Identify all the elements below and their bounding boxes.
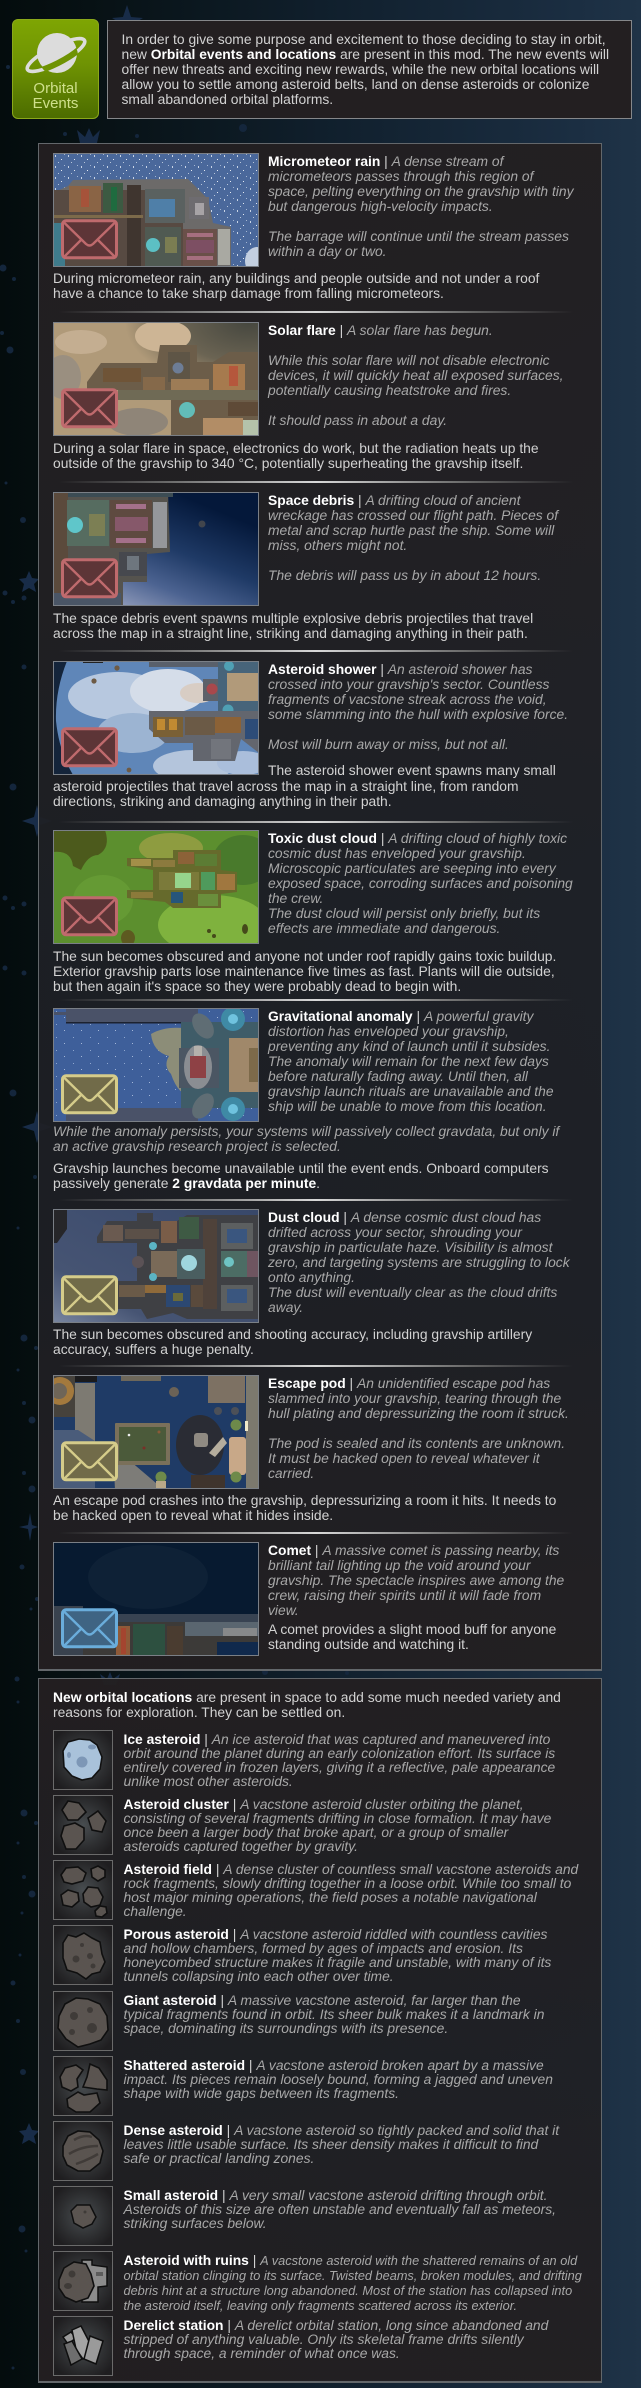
effect text: The space debris event spawns multiple explosive debris projectiles that travel — [53, 610, 533, 626]
description — [268, 153, 574, 259]
description: The dust cloud will persist only briefly, but its — [268, 905, 540, 921]
icon: envelope — [62, 898, 116, 935]
description: gravship. The spectacle inspires awe among the — [268, 1572, 564, 1588]
description: tunnels collapsing into each other over time. — [124, 1968, 394, 1984]
description: impact. Its pieces remain loosely bound, forming a jagged and uneven — [124, 2071, 553, 2087]
description — [268, 1008, 554, 1114]
description: some slamming into the hull with explosive force. — [268, 706, 568, 722]
icon: asteroid with ruins — [53, 2251, 113, 2311]
description: entirely covered in frozen layers, giving it a reflective, pale appearance — [124, 1759, 555, 1775]
image: comet scene with envelope — [53, 1542, 259, 1656]
description: Toxic dust cloud | A drifting cloud of highly toxic — [268, 830, 567, 846]
effect text — [53, 440, 539, 471]
description — [268, 1209, 570, 1315]
description: striking surfaces below. — [124, 2215, 267, 2231]
event: Asteroid shower: directions, striking and damaging anything in their path. — [53, 792, 392, 808]
description: Shattered asteroid | A vacstone asteroid broken apart by a massive — [124, 2057, 544, 2073]
description: crossed into your gravship's sector. Countless — [268, 676, 549, 692]
description: Asteroids of this size are often unstable and eventually fall as meteors, — [124, 2201, 556, 2217]
description: debris hint at a structure long abandoned. Most of the station has collapsed into — [124, 2283, 572, 2298]
description: It should pass in about a day. — [268, 412, 447, 428]
logo: Orbital Events — [12, 19, 99, 119]
description: the asteroid itself, leaving only fragments scattered across its exterior. — [124, 2298, 517, 2313]
effect text — [53, 1492, 556, 1523]
icon: small asteroid — [53, 2186, 113, 2246]
description: through space, a reminder of what once was. — [124, 2345, 400, 2361]
effect text: During micrometeor rain, any buildings and people outside and not under a roof — [53, 270, 539, 286]
effect text: The sun becomes obscured and anyone not under roof rapidly gains toxic buildup. — [53, 948, 556, 964]
description: unlike most other asteroids. — [124, 1773, 293, 1789]
description: asteroids captured together by gravity. — [124, 1838, 358, 1854]
description — [124, 2253, 582, 2313]
location: Ice asteroid — [53, 1730, 555, 1790]
image: dust cloud scene with envelope — [53, 1209, 259, 1323]
effect text: While the anomaly persists, your systems will passively collect gravdata, but only if — [53, 1122, 559, 1138]
location: Derelict station — [53, 2316, 588, 2376]
logo label — [33, 80, 78, 112]
description — [268, 492, 560, 583]
image: toxic dust cloud scene with envelope — [53, 830, 259, 944]
description: micrometeors passes through this region of — [268, 168, 533, 184]
location: Porous asteroid — [53, 1925, 588, 1985]
description: devices, it will quickly heat all exposed surfaces, — [268, 367, 563, 383]
description: Derelict station | A derelict orbital station, long since abandoned and — [124, 2317, 548, 2333]
description: typical fragments found in orbit. Its sheer bulk makes it a landmark in — [124, 2006, 544, 2022]
intro text box: small abandoned orbital platforms. — [122, 90, 333, 106]
description: Space debris | A drifting cloud of ancient — [268, 492, 520, 508]
description: view. — [268, 1602, 299, 1618]
icon: porous asteroid — [53, 1925, 113, 1985]
description: slammed into your gravship, tearing through the — [268, 1390, 561, 1406]
icon: envelope — [62, 1610, 116, 1647]
description: Escape pod | An unidentified escape pod has — [268, 1375, 550, 1391]
description: While this solar flare will not disable electronic — [268, 352, 550, 368]
effect text: across the map in a straight line, striking and damaging anything in their path. — [53, 625, 528, 641]
image: escape pod scene with envelope — [53, 1375, 259, 1489]
description: potentially causing heatstroke and fires. — [268, 382, 511, 398]
icon: envelope — [62, 390, 116, 427]
effect text — [53, 948, 556, 994]
description: Microscopic particulates are seeping into every — [268, 860, 556, 876]
description: shape with wide gaps between its fragments. — [124, 2085, 399, 2101]
description: orbit around the planet during an early colonization effort. Its surface is — [124, 1745, 555, 1761]
effect text: outside of the gravship to 340 °C, potentially superheating the gravship itself. — [53, 455, 523, 471]
description: Most will burn away or miss, but not all. — [268, 736, 509, 752]
effect text — [53, 1122, 560, 1154]
description: distortion has enveloped your gravship, — [268, 1023, 509, 1039]
description: ship will be unable to move from this location. — [268, 1098, 547, 1114]
description: Asteroid shower | An asteroid shower has — [268, 661, 532, 677]
description: gravship launch rituals are unavailable and the — [268, 1083, 554, 1099]
event: Dust cloud — [53, 1209, 570, 1357]
description: once been a larger body that broke apart, or a group of smaller — [124, 1824, 508, 1840]
description: space, dominating its surroundings with its presence. — [124, 2020, 448, 2036]
description: exposed space, corroding surfaces and poisoning — [268, 875, 573, 891]
icon: ringed planet — [25, 33, 87, 74]
description: Asteroid cluster | A vacstone asteroid cluster orbiting the planet, — [124, 1796, 524, 1812]
description — [124, 1862, 578, 1918]
description: wreckage has crossed our flight path. Pieces of — [268, 507, 558, 523]
description: effects are immediate and dangerous. — [268, 920, 500, 936]
description: the crew. — [268, 890, 323, 906]
effect text: but then again it's space so they were probably dead to begin with. — [53, 978, 461, 994]
description: The debris will pass us by in about 12 hours. — [268, 567, 541, 583]
description: host major mining operations, the field poses a notable navigational — [124, 1889, 537, 1905]
description: Dust cloud | A dense cosmic dust cloud has — [268, 1209, 541, 1225]
effect text: During a solar flare in space, electronics do work, but the radiation heats up the — [53, 440, 539, 456]
description: Gravitational anomaly | A powerful gravity — [268, 1008, 533, 1024]
description: challenge. — [124, 1903, 187, 1919]
event: Escape pod — [53, 1375, 569, 1523]
description: crew, raising their spirits until it will fade from — [268, 1587, 541, 1603]
location: Shattered asteroid — [53, 2056, 588, 2116]
effect text: A comet provides a slight mood buff for anyone — [268, 1620, 556, 1636]
effect text: The sun becomes obscured and shooting accuracy, including gravship artillery — [53, 1326, 532, 1342]
description: miss, others might not. — [268, 537, 407, 553]
location: Asteroid with ruins — [53, 2251, 588, 2311]
description — [268, 830, 573, 936]
description — [124, 2123, 559, 2165]
description: safe or practical landing zones. — [124, 2150, 314, 2166]
description — [124, 2058, 553, 2100]
icon: ice asteroid — [53, 1730, 113, 1790]
description: away. — [268, 1299, 303, 1315]
description — [124, 1927, 551, 1983]
logo label: Orbital — [33, 80, 78, 97]
description: space, pelting everything on the gravship with tiny — [268, 183, 574, 199]
effect text: an active gravship research project is selected. — [53, 1138, 341, 1154]
description: within a day or two. — [268, 243, 386, 259]
event: Gravitational anomaly: Gravship launches become unavailable until the event ends. Onboard computers — [53, 1160, 549, 1176]
description — [124, 2188, 556, 2230]
effect text: standing outside and watching it. — [268, 1636, 469, 1652]
description — [268, 1375, 569, 1481]
location: Dense asteroid — [53, 2121, 588, 2181]
description: cosmic dust has enveloped your gravship. — [268, 845, 526, 861]
description: before naturally fading away. Until then, all — [268, 1068, 528, 1084]
description: gravship in particulate haze. Visibility is almost — [268, 1239, 552, 1255]
description: Dense asteroid | A vacstone asteroid so tightly packed and solid that it — [124, 2122, 559, 2138]
description: Porous asteroid | A vacstone asteroid riddled with countless cavities — [124, 1926, 547, 1942]
description: leaves little usable surface. Its sheer density makes it difficult to find — [124, 2136, 538, 2152]
event: Asteroid shower — [53, 661, 568, 809]
locations intro text — [53, 1688, 561, 1720]
description: rock fragments, slowly drifting together in a loose orbit. While too small to — [124, 1875, 571, 1891]
icon: envelope — [62, 1076, 116, 1113]
description: consisting of several fragments drifting in close formation. It may have — [124, 1810, 551, 1826]
intro text box: allow you to settle among asteroid belts, land on dense asteroids or colonize — [122, 76, 589, 92]
event: Comet — [53, 1542, 564, 1656]
location: Asteroid cluster — [53, 1795, 551, 1855]
intro text box: new Orbital events and locations are present in this mod. The new events will — [122, 46, 609, 62]
effect text: have a chance to take sharp damage from falling micrometeors. — [53, 285, 444, 301]
description: Small asteroid | A very small vacstone asteroid drifting through orbit. — [124, 2187, 547, 2203]
icon: asteroid field — [53, 1860, 113, 1920]
intro text box: offer new threats and exciting new rewards, while the new orbital locations will — [122, 60, 599, 76]
panel: orbital locations — [38, 1678, 602, 2383]
event: Asteroid shower: asteroid projectiles that travel across the map in a straight line, from random — [53, 778, 519, 794]
event: Gravitational anomaly — [53, 1008, 560, 1191]
description: stripped of anything valuable. Only its skeletal frame drifts silently — [124, 2331, 524, 2347]
icon: giant asteroid — [53, 1991, 113, 2051]
location: Small asteroid — [53, 2186, 588, 2246]
effect text — [268, 1620, 556, 1652]
description: drifted across your sector, shrouding your — [268, 1224, 522, 1240]
icon: asteroid cluster — [53, 1795, 113, 1855]
location: Asteroid field — [53, 1860, 588, 1920]
description: It must be hacked open to reveal whatever it — [268, 1450, 540, 1466]
event: Solar flare — [53, 322, 563, 471]
description — [268, 322, 563, 428]
description — [124, 2318, 548, 2360]
description: Solar flare | A solar flare has begun. — [268, 322, 493, 338]
description: The barrage will continue until the stream passes — [268, 228, 569, 244]
description: honeycombed structure makes it fragile and unstable, with many of its — [124, 1954, 551, 1970]
intro text box: In order to give some purpose and excitement to those deciding to stay in orbit, — [122, 30, 606, 46]
image: asteroid shower scene with envelope — [53, 661, 259, 775]
description — [268, 1542, 564, 1618]
image: solar flare scene with envelope — [53, 322, 259, 436]
description: Micrometeor rain | A dense stream of — [268, 153, 503, 169]
icon: envelope — [62, 1277, 116, 1314]
image: gravitational anomaly scene with envelope — [53, 1008, 259, 1122]
effect text — [53, 270, 540, 301]
description: Ice asteroid | An ice asteroid that was captured and maneuvered into — [124, 1731, 550, 1747]
icon: derelict station — [53, 2316, 113, 2376]
event: Space debris — [53, 492, 560, 641]
description: carried. — [268, 1465, 314, 1481]
description: hull plating and depressurizing the room it struck. — [268, 1405, 569, 1421]
description: Comet | A massive comet is passing nearby, its — [268, 1542, 559, 1558]
icon: envelope — [62, 1443, 116, 1480]
image: micrometeor rain scene with envelope — [53, 153, 259, 267]
effect text: Exterior gravship parts lose maintenance five times as fast. Plants will die outside, — [53, 963, 555, 979]
description: metal and scrap hurtle past the ship. Some will — [268, 522, 554, 538]
locations intro text: New orbital locations are present in space to add some much needed variety and — [53, 1688, 561, 1704]
panel: orbital events — [38, 143, 602, 1671]
description: zero, and targeting systems are struggling to lock — [268, 1254, 570, 1270]
icon: dense asteroid — [53, 2121, 113, 2181]
locations intro text: reasons for exploration. They can be settled on. — [53, 1704, 345, 1720]
event: Micrometeor rain — [53, 153, 574, 301]
description: brilliant tail lighting up the void around your — [268, 1557, 530, 1573]
description: The pod is sealed and its contents are unknown. — [268, 1435, 565, 1451]
description: orbital station clinging to its surface. Twisted beams, broken modules, and drifting — [124, 2268, 582, 2283]
description: Asteroid field | A dense cluster of countless small vacstone asteroids and — [124, 1861, 578, 1877]
description — [124, 1797, 551, 1853]
event: Toxic dust cloud — [53, 830, 573, 994]
description — [268, 661, 568, 752]
description — [124, 1993, 544, 2035]
effect text: be hacked open to reveal what it hides inside. — [53, 1507, 333, 1523]
image: space debris scene with envelope — [53, 492, 259, 606]
description: The dust will eventually clear as the cloud drifts — [268, 1284, 557, 1300]
effect text: accuracy, suffers a huge penalty. — [53, 1341, 254, 1357]
description: and hollow chambers, formed by ages of impacts and erosion. Its — [124, 1940, 523, 1956]
description: onto anything. — [268, 1269, 355, 1285]
effect text: An escape pod crashes into the gravship, depressurizing a room it hits. It needs to — [53, 1492, 556, 1508]
location: Giant asteroid — [53, 1991, 588, 2051]
icon: shattered asteroid — [53, 2056, 113, 2116]
icon: envelope — [62, 221, 116, 258]
logo label: Events — [33, 95, 78, 112]
event: Gravitational anomaly: passively generate 2 gravdata per minute. — [53, 1175, 320, 1191]
description: but dangerous high-velocity impacts. — [268, 198, 493, 214]
effect text — [53, 610, 533, 641]
icon: envelope — [62, 560, 116, 597]
description — [124, 1731, 555, 1789]
intro text box — [107, 20, 632, 119]
description: preventing any kind of launch until it subsides. — [268, 1038, 550, 1054]
description: The anomaly will remain for the next few days — [268, 1053, 549, 1069]
effect text — [53, 1326, 532, 1357]
description: fragments of vacstone streak across the void, — [268, 691, 547, 707]
description: Asteroid with ruins | A vacstone asteroid with the shattered remains of an old — [124, 2252, 577, 2268]
icon: envelope — [62, 729, 116, 766]
effect text: The asteroid shower event spawns many small — [268, 762, 556, 778]
description: Giant asteroid | A massive vacstone asteroid, far larger than the — [124, 1992, 521, 2008]
